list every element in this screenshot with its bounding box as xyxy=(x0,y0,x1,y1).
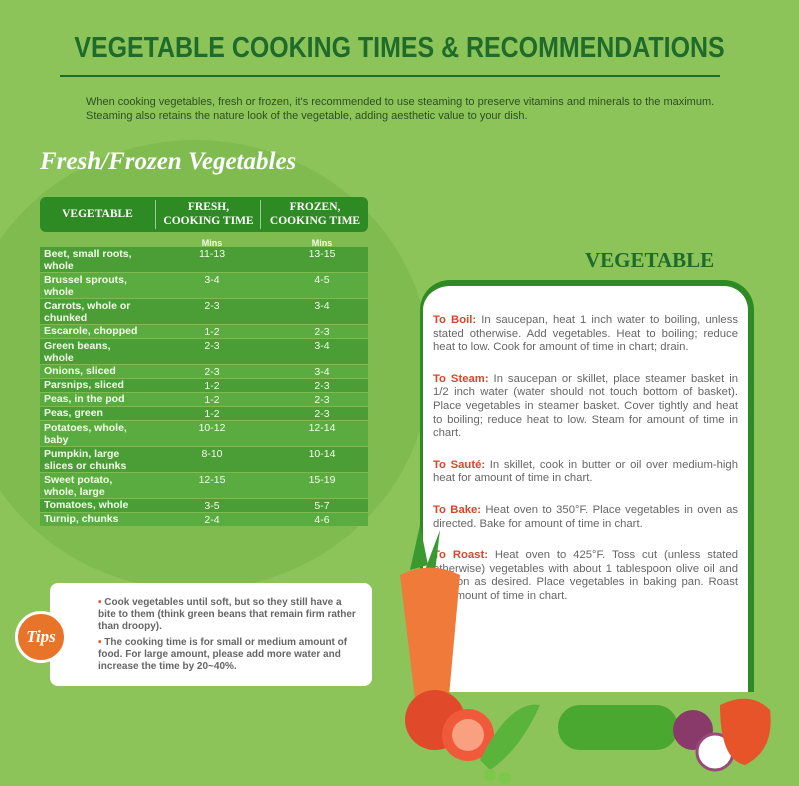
methods card: To Steam: In saucepan or skillet, place steamer basket in 1/2 inch water (water should not touch bottom of basket). Place vegetables in steamer basket. Cover tightly and heat to boiling; reduce heat to low. Steam for amount of time in chart. xyxy=(433,373,738,439)
table: 3-4 xyxy=(204,274,220,286)
table header: FRESH, xyxy=(188,201,229,213)
table: 12-14 xyxy=(309,422,335,434)
table: Tomatoes, whole xyxy=(44,499,128,511)
title: VEGETABLE COOKING TIMES & RECOMMENDATIONS xyxy=(74,32,725,64)
table: 15-19 xyxy=(309,474,335,486)
table header xyxy=(40,197,368,232)
vegetable heading: VEGETABLE xyxy=(585,248,714,272)
carrot xyxy=(400,525,460,750)
table: 2-3 xyxy=(204,340,220,352)
table: baby xyxy=(44,434,69,446)
table: 3-5 xyxy=(204,500,220,512)
table: 12-15 xyxy=(199,474,225,486)
table xyxy=(40,197,368,526)
methods card xyxy=(420,280,754,692)
table: Turnip, chunks xyxy=(44,513,118,525)
table: Escarole, chopped xyxy=(44,325,137,337)
icon: tips badge: Tips xyxy=(26,627,56,646)
table header: FROZEN, xyxy=(290,201,340,213)
onion xyxy=(673,710,733,770)
table: 10-12 xyxy=(199,422,225,434)
table: 1-2 xyxy=(204,326,220,338)
table: 2-3 xyxy=(314,394,330,406)
table: chunked xyxy=(44,312,87,324)
table: Pumpkin, large xyxy=(44,448,119,460)
table: 3-4 xyxy=(314,300,330,312)
table: Brussel sprouts, xyxy=(44,274,127,286)
table: whole xyxy=(44,286,74,298)
table: slices or chunks xyxy=(44,460,126,472)
tomato xyxy=(405,690,494,761)
table: Mins xyxy=(202,238,222,248)
table: 2-3 xyxy=(314,380,330,392)
table: Potatoes, whole, xyxy=(44,422,127,434)
table: 11-13 xyxy=(199,248,225,260)
table: 3-4 xyxy=(314,340,330,352)
table: 1-2 xyxy=(204,408,220,420)
table: Onions, sliced xyxy=(44,365,116,377)
table: 13-15 xyxy=(309,248,335,260)
background circle xyxy=(0,140,430,590)
tips box xyxy=(50,583,372,686)
icon: tips badge xyxy=(15,611,67,663)
table: 3-4 xyxy=(314,366,330,378)
table: 5-7 xyxy=(314,500,330,512)
table: Peas, green xyxy=(44,407,103,419)
table: 4-5 xyxy=(314,274,330,286)
methods card: To Roast: Heat oven to 425°F. Toss cut (unless stated otherwise) vegetables with about 1 tablespoon olive oil and season as desired. Place vegetables in baking pan. Roast for amount of time in chart. xyxy=(433,549,738,602)
table: whole, large xyxy=(44,486,105,498)
table: Mins xyxy=(312,238,332,248)
methods card: To Boil: In saucepan, heat 1 inch water to boiling, unless stated otherwise. Add vegetables. Heat to boiling; reduce heat to low. Cook for amount of time in chart; drain. xyxy=(433,314,738,353)
tips box: • The cooking time is for small or medium amount of food. For large amount, please add more water and increase the time by 20~40%. xyxy=(98,637,347,672)
table: 8-10 xyxy=(201,448,222,460)
methods card: To Sauté: In skillet, cook in butter or oil over medium-high heat for amount of time in chart. xyxy=(433,459,738,484)
table: whole xyxy=(44,260,74,272)
peas xyxy=(480,705,540,784)
table: 2-3 xyxy=(204,366,220,378)
table header: COOKING TIME xyxy=(163,215,254,227)
tips box: • Cook vegetables until soft, but so they still have a bite to them (think green beans that remain firm rather than droopy). xyxy=(98,597,356,632)
table: 2-3 xyxy=(314,326,330,338)
table header: VEGETABLE xyxy=(62,208,133,220)
cucumber xyxy=(558,705,678,750)
illustration: vegetables xyxy=(400,525,771,784)
table: 10-14 xyxy=(309,448,335,460)
table: whole xyxy=(44,352,74,364)
pepper xyxy=(720,699,771,765)
table: Parsnips, sliced xyxy=(44,379,124,391)
table: Green beans, xyxy=(44,340,111,352)
table: 1-2 xyxy=(204,380,220,392)
intro text: When cooking vegetables, fresh or frozen, it's recommended to use steaming to preserve vitamins and minerals to the maximum. Steaming also retains the nature look of the vegetable, adding aesthetic value to your dish. xyxy=(86,96,714,122)
table: 2-4 xyxy=(204,514,220,526)
table: 2-3 xyxy=(314,408,330,420)
table: 1-2 xyxy=(204,394,220,406)
table header: COOKING TIME xyxy=(270,215,360,227)
table: 4-6 xyxy=(314,514,330,526)
table: Beet, small roots, xyxy=(44,248,132,260)
section heading: Fresh/Frozen Vegetables xyxy=(40,148,296,175)
table: Peas, in the pod xyxy=(44,393,125,405)
table: Sweet potato, xyxy=(44,474,112,486)
methods card: To Bake: Heat oven to 350°F. Place vegetables in oven as directed. Bake for amount of time in chart. xyxy=(433,504,738,530)
table: 2-3 xyxy=(204,300,220,312)
table: Carrots, whole or xyxy=(44,300,130,312)
